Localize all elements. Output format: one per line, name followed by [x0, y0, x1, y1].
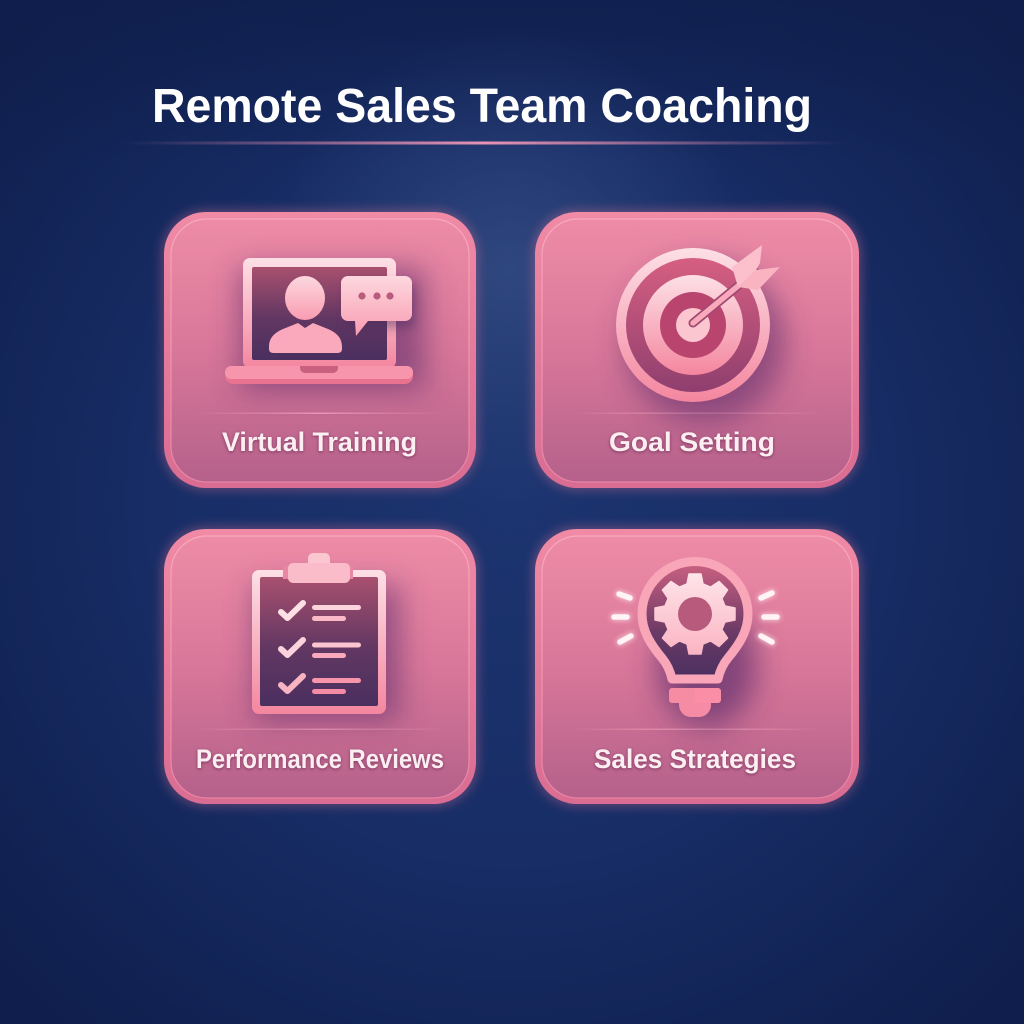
- icon: laptop with video call: [225, 258, 425, 390]
- icon: clipboard checklist: [252, 553, 400, 720]
- title: Remote Sales Team Coaching: [152, 80, 812, 133]
- panel: virtual training: [161, 209, 479, 491]
- label: goal setting: Goal Setting: [609, 427, 775, 457]
- panel: performance reviews: [161, 526, 479, 807]
- label: performance reviews: Performance Reviews: [196, 744, 444, 774]
- icon: light rays: [614, 593, 777, 642]
- icon: target with arrow: [616, 245, 785, 422]
- panel: sales strategies: [532, 526, 862, 807]
- icon: light bulb with gear: [614, 562, 777, 727]
- label: sales strategies: Sales Strategies: [594, 744, 796, 774]
- panel: goal setting: [532, 209, 862, 491]
- label: virtual training: Virtual Training: [222, 427, 417, 457]
